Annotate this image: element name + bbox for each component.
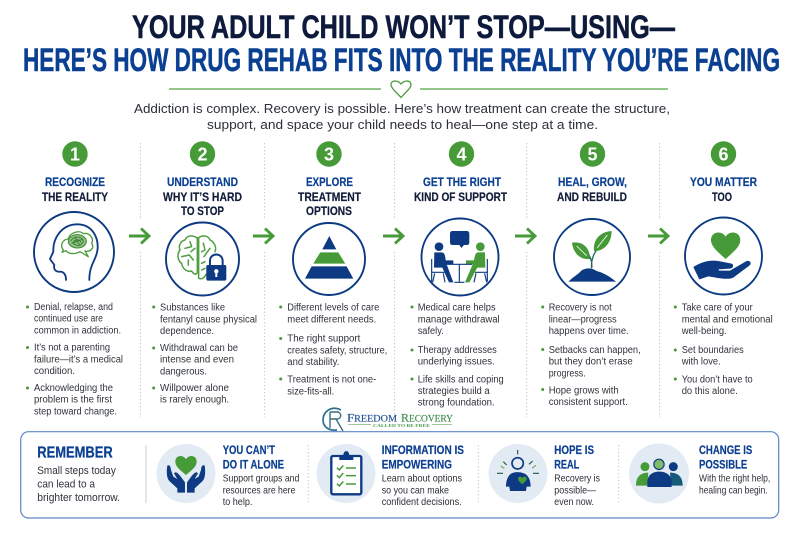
remember text: REMEMBER: [37, 445, 113, 462]
bullet list 5: Setbacks can happen,: [549, 345, 641, 356]
heading 3: [298, 175, 361, 218]
bullet list 4: underlying issues.: [418, 357, 495, 368]
arrow 2: [253, 228, 273, 244]
heading 5: AND REBUILD: [557, 190, 627, 204]
remember text: can lead to a: [37, 479, 96, 491]
number badge 3: 3: [324, 144, 334, 164]
text: hope is real: possible—: [554, 485, 597, 496]
text: information is empowering: EMPOWERING: [382, 458, 452, 472]
bullet list 6: [674, 303, 773, 397]
bullet list 3: creates safety, structure,: [287, 345, 387, 356]
bullet list 6: Take care of your: [682, 303, 753, 314]
arrow 1: [129, 228, 149, 244]
bullet list 2: Substances like: [160, 303, 225, 314]
icon: person with glowing heart: [488, 444, 548, 503]
bullet list 4: Therapy addresses: [418, 345, 497, 356]
bullet list 3: meet different needs.: [287, 314, 376, 325]
heading 1: RECOGNIZE: [45, 175, 105, 189]
text: you can't do it alone: DO IT ALONE: [223, 458, 284, 472]
text: you can't do it alone: Support groups and: [223, 474, 299, 485]
bullet list 2: fentanyl cause physical: [160, 314, 257, 325]
intro text: support, and space your child needs to heal—one step at a time.: [207, 117, 598, 132]
text: hope is real: REAL: [554, 458, 580, 472]
bullet list 1: Acknowledging the: [34, 383, 113, 394]
heading 2: TO STOP: [181, 204, 224, 218]
number badge 2: 2: [197, 144, 208, 164]
heading 5: [557, 175, 627, 204]
heading 3: EXPLORE: [306, 175, 353, 189]
intro text: [134, 101, 670, 132]
heading 1: THE REALITY: [42, 190, 109, 204]
bullet list 3: Different levels of care: [287, 303, 380, 314]
number badge 4: 4: [456, 144, 467, 164]
bullet list 1: step toward change.: [34, 406, 117, 417]
logo: Freedom Recovery: FREEDOM: [347, 410, 398, 424]
bullet list 5: Hope grows with: [549, 385, 619, 396]
number badge 5: [580, 141, 605, 167]
arrow 4: [515, 228, 535, 244]
text: you can't do it alone: to help.: [223, 497, 252, 508]
heading 2: WHY IT’S HARD: [163, 190, 242, 204]
text: information is empowering: [382, 443, 464, 508]
number badge 1: 1: [70, 144, 80, 164]
bullet list 5: progress.: [549, 368, 586, 379]
text: change is possible: POSSIBLE: [699, 458, 747, 472]
bullet list 3: [279, 303, 387, 397]
number badge 1: [62, 141, 88, 167]
bullet list 1: condition.: [34, 366, 75, 377]
remember text: brighter tomorrow.: [37, 492, 120, 504]
text: hope is real: [554, 443, 600, 508]
heart divider: [169, 81, 668, 98]
bullet list 6: You don’t have to: [682, 374, 753, 385]
text: change is possible: [699, 443, 770, 496]
bullet list 1: [26, 302, 123, 417]
bullet list 5: [541, 303, 641, 408]
heading 2: UNDERSTAND: [167, 175, 238, 189]
heading 4: [414, 175, 507, 204]
number badge 6: 6: [718, 144, 729, 164]
bullet list 5: linear—progress: [549, 314, 617, 325]
icon: hands holding heart: [156, 444, 216, 503]
heading 5: HEAL, GROW,: [558, 175, 627, 189]
bullet list 1: failure—it’s a medical: [34, 354, 123, 365]
bullet list 2: Willpower alone: [160, 383, 229, 394]
icon: checklist clipboard: [316, 444, 376, 503]
text: change is possible: healing can begin.: [699, 485, 768, 496]
panel: step 6 you matter: [674, 141, 773, 397]
bullet list 1: problem is the first: [34, 395, 112, 406]
bullet list 1: common in addiction.: [34, 325, 121, 336]
bullet list 1: continued use are: [34, 314, 103, 325]
text: information is empowering: INFORMATION IS: [382, 443, 464, 457]
text: change is possible: With the right help,: [699, 474, 770, 485]
bullet list 2: is rarely enough.: [160, 395, 229, 406]
icon: heart in open hand: [685, 218, 762, 294]
heading 3: TREATMENT: [298, 190, 361, 204]
bullet list 3: and stability.: [287, 357, 339, 368]
heading 3: OPTIONS: [306, 204, 352, 218]
logo: Freedom Recovery: CALLED TO BE FREE: [373, 423, 430, 428]
heading 4: KIND OF SUPPORT: [414, 190, 507, 204]
bullet list 4: [410, 303, 504, 409]
heading 6: [690, 175, 757, 204]
text: information is empowering: so you can make: [382, 485, 449, 496]
remember text: [37, 445, 120, 504]
text: hope is real: Recovery is: [554, 474, 600, 485]
panel: step 4 support: [410, 141, 507, 409]
remember text: Small steps today: [37, 465, 116, 477]
bullet list 2: intense and even: [160, 355, 234, 366]
text: hope is real: even now.: [554, 497, 594, 508]
bullet list 4: strategies build a: [418, 386, 490, 397]
icon: brain with padlock: [166, 222, 239, 296]
bullet list 3: Treatment is not one-: [287, 375, 376, 386]
bullet list 6: with love.: [681, 357, 721, 368]
bullet list 6: mental and emotional: [682, 314, 773, 325]
panel: step 3 explore: [279, 141, 387, 397]
bullet list 4: manage withdrawal: [418, 314, 500, 325]
icon: sprout in soil: [554, 219, 630, 295]
intro text: Addiction is complex. Recovery is possible. Here’s how treatment can create the structure,: [134, 101, 670, 116]
bullet list 5: but they don’t erase: [549, 357, 633, 368]
panel: remember banner: [21, 432, 779, 518]
icon: care-level pyramid: [293, 223, 365, 295]
text: hope is real: HOPE IS: [554, 443, 594, 457]
bullet list 4: Medical care helps: [418, 303, 496, 314]
bullet list 3: The right support: [287, 334, 361, 345]
text: change is possible: CHANGE IS: [699, 443, 752, 457]
arrow 5: [648, 228, 668, 244]
arrow 3: [383, 228, 403, 244]
number badge 5: 5: [587, 144, 598, 164]
bullet list 6: Set boundaries: [682, 345, 744, 356]
number badge 4: [449, 141, 474, 167]
bullet list 6: well-being.: [681, 326, 727, 337]
number badge 6: [711, 141, 736, 167]
panel: step 5 heal: [541, 141, 641, 408]
bullet list 3: size-fits-all.: [287, 386, 334, 397]
icon: head with tangled thoughts: [34, 212, 114, 292]
panel: step 1 recognize: [26, 141, 123, 417]
logo: Freedom Recovery: [323, 408, 453, 431]
heading 6: YOU MATTER: [690, 175, 757, 189]
panel: step 2 understand: [152, 141, 257, 406]
bullet list 6: do this alone.: [682, 386, 738, 397]
bullet list 4: Life skills and coping: [418, 374, 504, 385]
bullet list 2: dependence.: [160, 326, 214, 337]
heading 4: GET THE RIGHT: [423, 175, 501, 189]
text: you can't do it alone: [223, 443, 299, 508]
text: information is empowering: Learn about options: [382, 474, 462, 485]
icon: two people talking at a table: [422, 218, 498, 296]
number badge 3: [316, 141, 342, 167]
bullet list 1: It’s not a parenting: [34, 343, 110, 354]
text: information is empowering: confident decisions.: [382, 497, 462, 508]
number badge 2: [190, 141, 215, 167]
bullet list 1: Denial, relapse, and: [34, 302, 113, 313]
heading 2: [163, 175, 242, 218]
bullet list 4: strong foundation.: [418, 398, 495, 409]
icon: group of three people: [629, 444, 689, 504]
bullet list 2: [152, 303, 257, 406]
bullet list 2: Withdrawal can be: [160, 343, 238, 354]
heading 6: TOO: [712, 190, 732, 204]
bullet list 5: consistent support.: [549, 397, 628, 408]
bullet list 5: Recovery is not: [549, 303, 612, 314]
logo: Freedom Recovery: RECOVERY: [401, 410, 453, 424]
text: you can't do it alone: resources are here: [223, 485, 296, 496]
text: you can't do it alone: YOU CAN’T: [223, 443, 275, 457]
bullet list 4: safely.: [418, 326, 444, 337]
bullet list 5: happens over time.: [549, 326, 629, 337]
title: [23, 9, 780, 78]
bullet list 2: dangerous.: [160, 366, 207, 377]
heading 1: [42, 175, 109, 204]
